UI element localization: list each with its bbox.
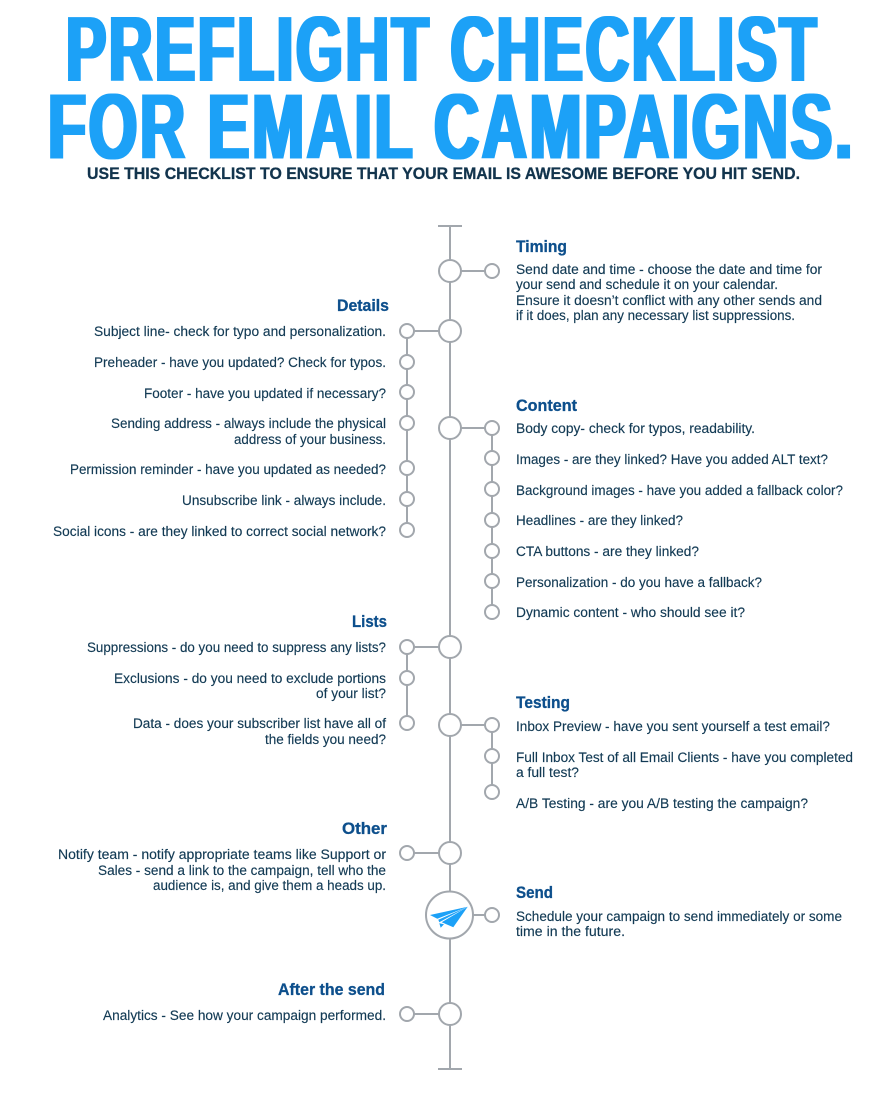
panel: lists: Suppressions - do you need to suppress any lists? bbox=[87, 640, 386, 656]
panel: other: audience is, and give them a heads up. bbox=[153, 878, 386, 894]
panel: timing: Ensure it doesn’t conflict with any other sends and bbox=[516, 293, 822, 309]
panel: after the send: After the send bbox=[278, 980, 385, 999]
panel: testing bbox=[516, 693, 853, 812]
timeline nodes bbox=[400, 260, 499, 1025]
panel: testing: Full Inbox Test of all Email Clients - have you completed bbox=[516, 750, 853, 766]
panel: other bbox=[58, 819, 387, 894]
panel: details: Subject line- check for typo and personalization. bbox=[94, 324, 386, 340]
panel: content bbox=[516, 396, 843, 621]
panel: testing: a full test? bbox=[516, 765, 579, 781]
panel: details: address of your business. bbox=[234, 432, 386, 448]
panel: send: Send bbox=[516, 883, 553, 902]
panel: after the send: Analytics - See how your campaign performed. bbox=[103, 1008, 386, 1024]
panel: lists: of your list? bbox=[316, 686, 386, 702]
subtitle: USE THIS CHECKLIST TO ENSURE THAT YOUR EMAIL IS AWESOME BEFORE YOU HIT SEND. bbox=[87, 164, 800, 183]
title bbox=[48, 0, 855, 178]
panel: lists: Data - does your subscriber list have all of bbox=[133, 716, 386, 732]
panel: content: Body copy- check for typos, readability. bbox=[516, 421, 755, 437]
panel: content: Background images - have you added a fallback color? bbox=[516, 483, 843, 499]
panel: details bbox=[53, 296, 389, 540]
panel: other: Sales - send a link to the campaign, tell who the bbox=[98, 863, 386, 879]
panel: details: Unsubscribe link - always include. bbox=[182, 493, 386, 509]
panel: details: Sending address - always include the physical bbox=[111, 416, 386, 432]
panel: testing: A/B Testing - are you A/B testing the campaign? bbox=[516, 796, 808, 812]
panel: content: Content bbox=[516, 396, 577, 415]
panel: lists bbox=[87, 612, 387, 748]
panel: timing: your send and schedule it on your calendar. bbox=[516, 277, 778, 293]
timeline spine bbox=[407, 226, 492, 1069]
panel: timing: Send date and time - choose the date and time for bbox=[516, 262, 822, 278]
panel: lists: Lists bbox=[352, 612, 387, 631]
panel: send bbox=[516, 883, 842, 940]
panel: timing: if it does, plan any necessary list suppressions. bbox=[516, 308, 795, 324]
panel: details: Preheader - have you updated? Check for typos. bbox=[94, 355, 386, 371]
panel: other: Notify team - notify appropriate teams like Support or bbox=[58, 847, 386, 863]
panel: timing bbox=[516, 237, 822, 324]
panel: timing: Timing bbox=[516, 237, 567, 256]
panel: content: Personalization - do you have a fallback? bbox=[516, 575, 762, 591]
panel: send: time in the future. bbox=[516, 924, 625, 940]
panel: testing: Inbox Preview - have you sent yourself a test email? bbox=[516, 719, 830, 735]
panel: send: Schedule your campaign to send immediately or some bbox=[516, 909, 842, 925]
panel: lists: the fields you need? bbox=[265, 732, 386, 748]
panel: details: Details bbox=[337, 296, 389, 315]
panel: after the send bbox=[103, 980, 386, 1024]
panel: lists: Exclusions - do you need to exclude portions bbox=[114, 671, 386, 687]
panel: content: Images - are they linked? Have you added ALT text? bbox=[516, 452, 828, 468]
panel: content: CTA buttons - are they linked? bbox=[516, 544, 699, 560]
panel: other: Other bbox=[342, 819, 387, 838]
panel: details: Footer - have you updated if necessary? bbox=[144, 386, 386, 402]
panel: testing: Testing bbox=[516, 693, 570, 712]
panel: content: Headlines - are they linked? bbox=[516, 513, 683, 529]
panel: content: Dynamic content - who should see it? bbox=[516, 605, 745, 621]
panel: details: Permission reminder - have you updated as needed? bbox=[70, 462, 386, 478]
panel: details: Social icons - are they linked to correct social network? bbox=[53, 524, 386, 540]
icon: paper plane bbox=[426, 892, 473, 938]
